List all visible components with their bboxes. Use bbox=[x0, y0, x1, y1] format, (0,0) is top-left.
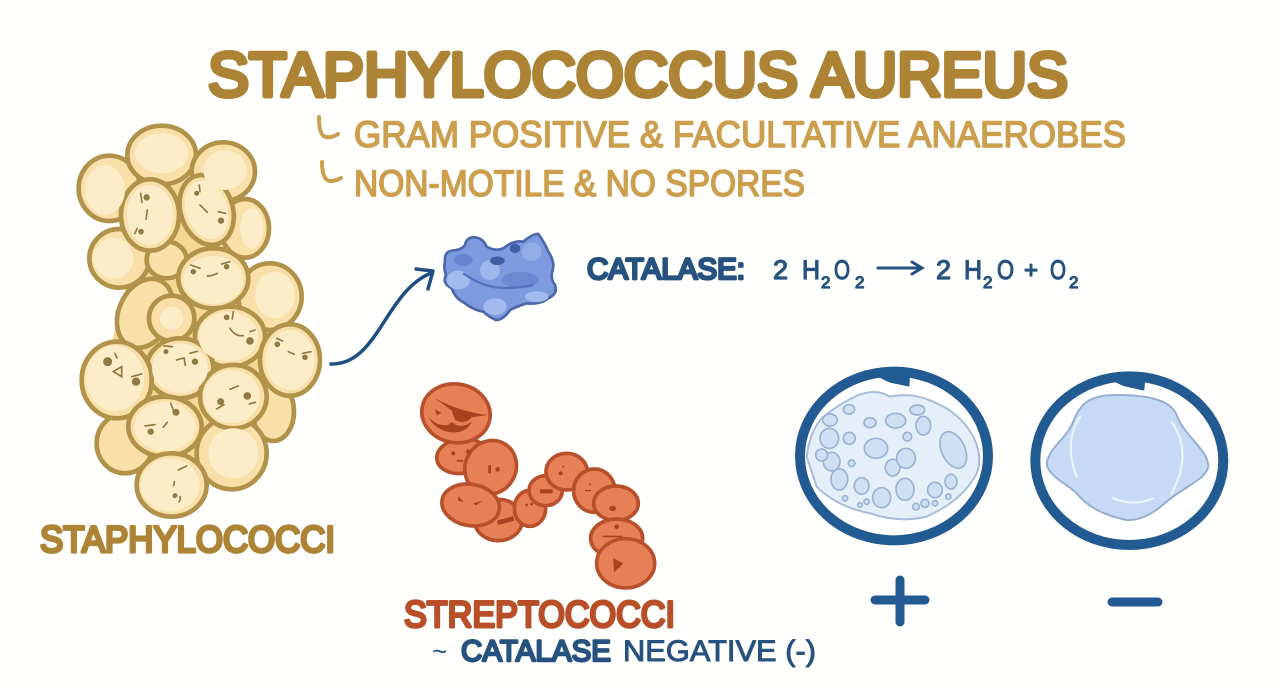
catalase reaction equation: + bbox=[1024, 257, 1038, 284]
minus sign bbox=[1112, 598, 1158, 606]
cell faces bbox=[104, 185, 311, 502]
catalase reaction equation: H bbox=[802, 255, 820, 285]
catalase negative note bbox=[432, 635, 816, 668]
catalase reaction equation: 2 bbox=[1069, 273, 1078, 292]
plus sign bbox=[875, 580, 925, 622]
catalase reaction equation: 2 bbox=[983, 273, 992, 292]
catalase reaction equation: H bbox=[964, 255, 982, 285]
catalase label: CATALASE: bbox=[587, 253, 745, 286]
cell highlights bbox=[85, 133, 315, 512]
catalase word: CATALASE bbox=[461, 635, 611, 668]
bullet hook 1 bbox=[319, 117, 338, 137]
subtitle bullets bbox=[319, 114, 1126, 204]
title: STAPHYLOCOCCUS AUREUS bbox=[208, 41, 1068, 110]
catalase reaction equation: O bbox=[834, 255, 850, 285]
catalase negative test plate bbox=[1035, 375, 1223, 545]
cluster base fill bbox=[110, 177, 273, 477]
property line 2: NON-MOTILE & NO SPORES bbox=[354, 163, 805, 204]
still hydrogen peroxide bbox=[1047, 395, 1208, 520]
label: staphylococci: STAPHYLOCOCCI bbox=[40, 519, 335, 560]
catalase reaction equation: O bbox=[997, 255, 1014, 285]
reaction arrow bbox=[878, 262, 922, 274]
bullet hook 2 bbox=[322, 162, 341, 181]
property line 1: GRAM POSITIVE & FACULTATIVE ANAEROBES bbox=[354, 114, 1126, 155]
label: streptococci: STREPTOCOCCI bbox=[404, 594, 675, 635]
strep faces bbox=[428, 398, 623, 573]
icon: catalase protein bbox=[444, 234, 556, 320]
catalase reaction equation: 2 bbox=[821, 273, 830, 292]
protein surface shading bbox=[447, 242, 548, 315]
bubbling hydrogen peroxide bbox=[807, 392, 979, 519]
catalase reaction equation: O bbox=[1050, 255, 1066, 285]
catalase reaction equation: 2 bbox=[936, 255, 951, 285]
catalase reaction equation: 2 bbox=[855, 273, 864, 292]
catalase negative note: ~ bbox=[432, 636, 447, 666]
catalase positive test plate bbox=[800, 370, 988, 540]
arrow to catalase bbox=[331, 269, 433, 364]
catalase reaction equation bbox=[773, 255, 1078, 292]
staphylococci cluster bbox=[79, 126, 320, 517]
negative word: NEGATIVE (-) bbox=[623, 635, 816, 668]
streptococci chain bbox=[417, 378, 655, 588]
catalase reaction equation: 2 bbox=[773, 255, 788, 285]
